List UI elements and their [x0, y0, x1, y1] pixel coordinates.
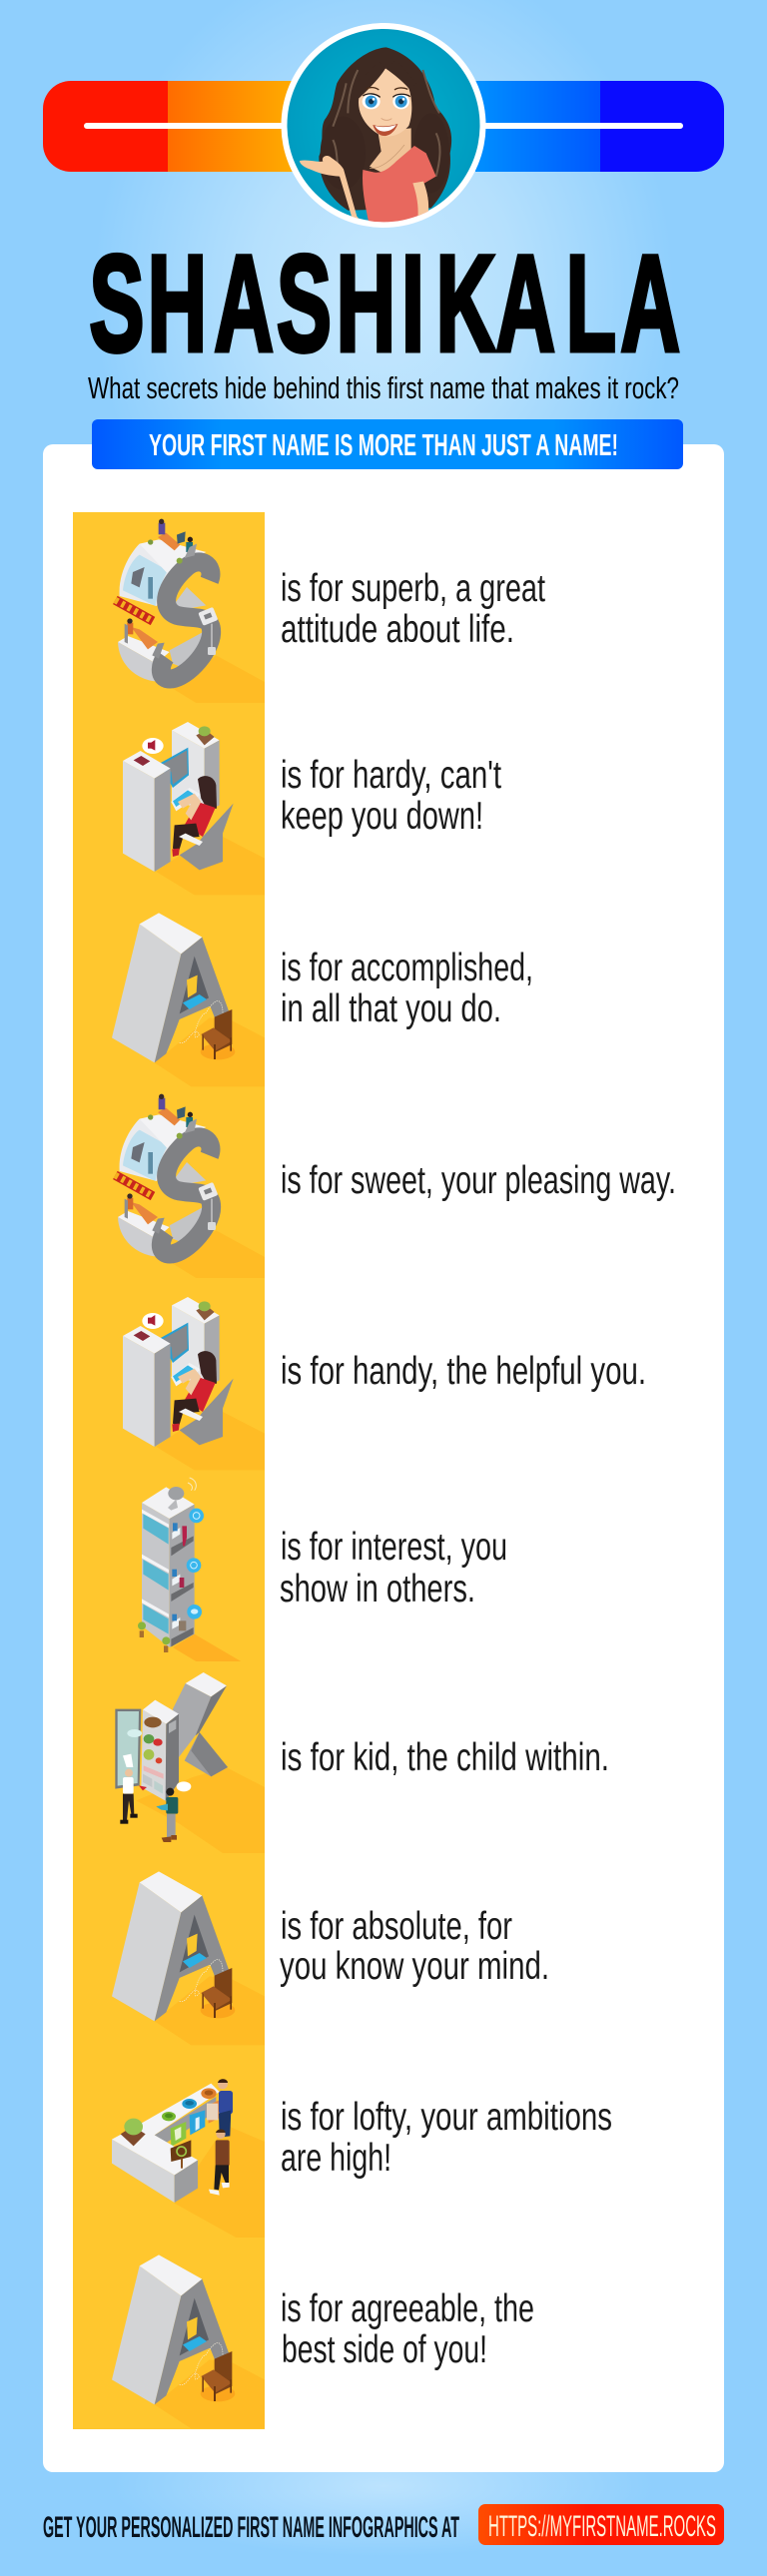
panel: white content card	[43, 444, 724, 2472]
row 4: S	[115, 1094, 676, 1278]
icon: isometric letter K fridge	[115, 1672, 265, 1853]
text: A line	[280, 1905, 549, 1988]
banner	[92, 419, 683, 469]
text: A line: best side of you!	[282, 2328, 487, 2371]
row 3: A	[112, 913, 533, 1086]
icon: isometric letter A	[112, 1871, 265, 2045]
text: S line: is for superb, a great	[281, 567, 545, 610]
icon: isometric letter I building	[138, 1478, 241, 1661]
portrait: cartoon woman in circle	[282, 23, 485, 228]
text: A line	[281, 947, 533, 1030]
text: A line: is for absolute, for	[281, 1905, 512, 1948]
text: A line: in all that you do.	[281, 987, 501, 1030]
icon: isometric letter A	[112, 2254, 265, 2428]
row 7: K	[115, 1672, 609, 1853]
text: L line	[281, 2096, 612, 2180]
text: I line: show in others.	[280, 1568, 475, 1610]
icon: isometric letter L recycling	[112, 2079, 265, 2238]
text: A line: is for agreeable, the	[281, 2287, 534, 2330]
icon: isometric letter S	[115, 1094, 265, 1278]
text: H line	[281, 754, 501, 838]
text: A line: you know your mind.	[280, 1945, 549, 1988]
header bar: left red orange segment	[43, 81, 294, 172]
text: L line: are high!	[281, 2137, 391, 2180]
text: I line: is for interest, you	[281, 1526, 507, 1569]
icon: isometric letter H	[123, 722, 265, 895]
title: SHASHIKALA: SHASHIKALA	[90, 227, 680, 379]
row 5: H	[123, 1297, 646, 1470]
row 10: A	[112, 2254, 534, 2428]
text: L line: is for lofty, your ambitions	[281, 2096, 612, 2139]
row 6: I	[138, 1478, 507, 1661]
panel: yellow illustration strip	[73, 512, 265, 2429]
text: H line: is for hardy, can't	[281, 754, 501, 797]
footer url button	[478, 2504, 724, 2545]
row 1: S	[115, 519, 545, 703]
row 2: H	[123, 722, 501, 895]
text: H line: is for handy, the helpful you.	[281, 1350, 646, 1393]
icon: isometric letter H	[123, 1297, 265, 1470]
row 8: A	[112, 1871, 549, 2045]
icon: isometric letter S	[115, 519, 265, 703]
icon: isometric letter A	[112, 913, 265, 1086]
text: S line: attitude about life.	[281, 608, 514, 651]
text: K line: is for kid, the child within.	[281, 1736, 609, 1779]
header bar: right blue segment	[473, 81, 724, 172]
row 9: L	[112, 2079, 612, 2238]
text: A line	[281, 2287, 534, 2371]
text: A line: is for accomplished,	[281, 947, 533, 989]
text: H line: keep you down!	[281, 795, 483, 838]
text: I line	[280, 1526, 507, 1610]
text: S line	[281, 567, 545, 651]
